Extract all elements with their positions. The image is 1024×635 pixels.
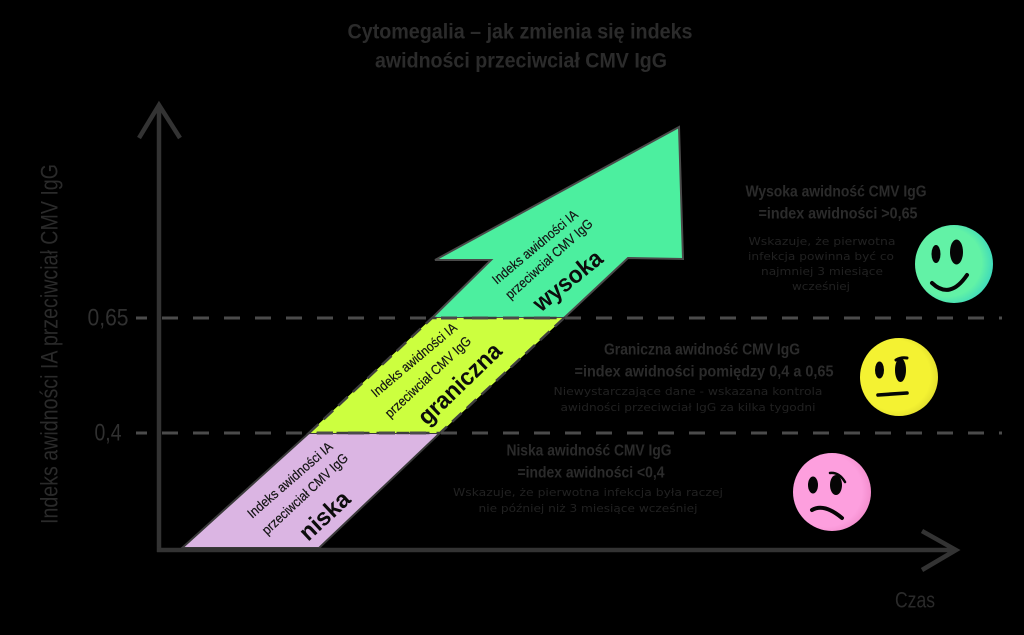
label: wysoka: Indeks awidności IA [489,207,581,287]
label: niska: przeciwciał CMV IgG [259,450,351,538]
text block: wysoka awidność: Wysoka awidność CMV IgG [746,184,926,200]
label: wysoka: przeciwciał CMV IgG [502,216,596,302]
text block: niska awidność: Wskazuje, że pierwotna infekcja była raczej [453,487,723,499]
label: graniczna [368,320,508,431]
x axis arrow [157,531,956,570]
rising arrow [182,127,683,548]
text block: wysoka awidność: infekcja powinna być co [748,251,894,263]
label: wysoka: wysoka [527,244,609,318]
title: awidności przeciwciał CMV IgG [375,50,667,72]
y axis arrow [139,105,180,552]
title [348,20,692,72]
arrow segment: graniczna [309,318,564,433]
label: niska: Indeks awidności IA [244,439,336,521]
text block: graniczna awidność: Niewystarczające dane - wskazana kontrola [554,386,822,398]
label: graniczna: graniczna [412,337,508,431]
arrow segment: niska [182,433,440,548]
text block: wysoka awidność: wcześniej [792,281,850,293]
text block: niska awidność: nie później niż 3 miesiące wcześniej [478,503,698,515]
text block: graniczna awidność [554,342,834,414]
text block: wysoka awidność [746,184,926,293]
text block: niska awidność [453,442,723,515]
y axis label: Indeks awidności IA przeciwciał CMV IgG [36,164,64,524]
text block: wysoka awidność: =index awidności >0,65 [758,206,918,222]
threshold line 0,4 [136,432,1002,434]
arrow segment: wysoka [432,127,683,318]
text block: graniczna awidność: Graniczna awidność CMV IgG [604,342,800,358]
label: niska: niska [294,485,357,546]
x axis label: Czas [895,588,935,612]
label: graniczna: przeciwciał CMV IgG [382,333,474,421]
tick label 0,4: 0,4 [94,420,122,446]
text block: niska awidność: Niska awidność CMV IgG [506,442,672,460]
text block: graniczna awidność: =index awidności pomiędzy 0,4 a 0,65 [574,364,834,380]
text block: graniczna awidność: awidności przeciwciał IgG za kilka tygodni [560,402,816,414]
icon: neutral face [860,338,938,416]
tick label 0,65: 0,65 [88,304,128,332]
icon: happy face [915,225,993,303]
icon: sad face [793,453,871,531]
title: Cytomegalia – jak zmienia się indeks [348,20,692,44]
text block: wysoka awidność: najmniej 3 miesiące [761,266,883,278]
label: graniczna: Indeks awidności IA [368,320,460,400]
text block: wysoka awidność: Wskazuje, że pierwotna [748,236,896,248]
threshold line 0,65 [136,316,1002,320]
text block: niska awidność: =index awidności <0,4 [518,464,665,482]
